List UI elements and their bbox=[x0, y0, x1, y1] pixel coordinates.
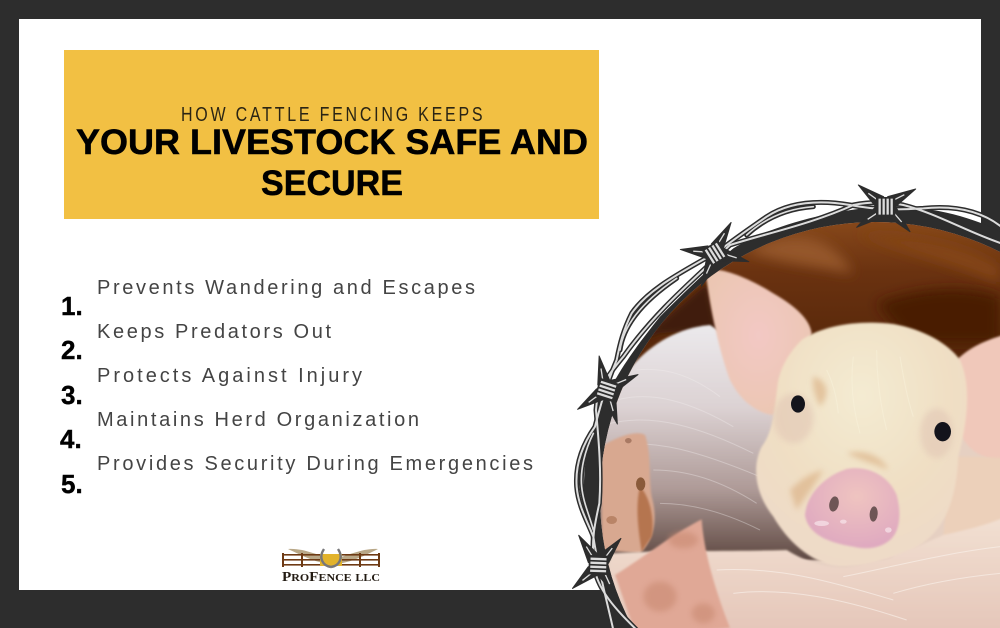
snout bbox=[805, 468, 899, 548]
title banner bbox=[64, 50, 599, 219]
ear speckles bbox=[643, 532, 715, 623]
dark ring band bbox=[584, 206, 1000, 628]
barbed wire bbox=[576, 202, 1000, 628]
barb upper left bbox=[679, 219, 754, 290]
left ear of second pig bbox=[602, 433, 655, 553]
wire light strands bbox=[576, 202, 1000, 628]
barb top bbox=[857, 185, 916, 232]
snout shine bbox=[814, 520, 892, 533]
photo bbox=[593, 217, 1000, 628]
logo horns bbox=[288, 549, 378, 564]
number 4: 4. bbox=[60, 424, 82, 454]
white pig body behind bbox=[600, 324, 821, 562]
pig photo inside barbed wire ring bbox=[572, 185, 1000, 628]
right eye bbox=[934, 422, 951, 441]
wire outline bbox=[576, 202, 1000, 628]
number 5: 5. bbox=[61, 469, 83, 499]
pig head bbox=[756, 323, 967, 566]
front ear of third pig bbox=[615, 519, 730, 628]
pig right ear bbox=[957, 335, 1000, 460]
number 1: 1. bbox=[61, 291, 83, 321]
item 1 text: Prevents Wandering and Escapes bbox=[97, 277, 475, 299]
fur strokes on body bbox=[610, 386, 760, 530]
title line two: SECURE bbox=[261, 164, 403, 203]
eye shading bbox=[773, 393, 953, 458]
fur highlights on head bbox=[826, 357, 914, 416]
barb lower left bbox=[572, 535, 621, 596]
facial markings bbox=[790, 377, 888, 510]
number 3: 3. bbox=[61, 380, 83, 410]
logo: ProFence LLC bbox=[282, 549, 380, 585]
item 4 text: Maintains Herd Organization bbox=[97, 409, 419, 431]
logo wordmark: PROFENCE LLC bbox=[282, 570, 380, 585]
title line one: YOUR LIVESTOCK SAFE AND bbox=[76, 123, 588, 162]
logo fence bbox=[282, 553, 380, 567]
barb left bbox=[577, 355, 640, 425]
item 5 text: Provides Security During Emergencies bbox=[97, 453, 533, 475]
item 2 text: Keeps Predators Out bbox=[97, 321, 331, 343]
nostrils bbox=[828, 496, 878, 522]
item 3 text: Protects Against Injury bbox=[97, 365, 362, 387]
left eye bbox=[791, 395, 805, 413]
fur strokes on foreground body bbox=[717, 547, 1000, 620]
numbered list bbox=[60, 277, 533, 499]
pig body in foreground bbox=[610, 517, 1000, 628]
neck at right bbox=[943, 457, 1000, 537]
pig left ear bbox=[706, 270, 812, 415]
title kicker: HOW CATTLE FENCING KEEPS bbox=[181, 103, 483, 125]
number 2: 2. bbox=[61, 335, 83, 365]
photo base bbox=[593, 217, 1000, 628]
logo horseshoe bbox=[321, 549, 341, 567]
logo badge bbox=[320, 554, 342, 566]
brown cow background bbox=[593, 217, 1000, 403]
